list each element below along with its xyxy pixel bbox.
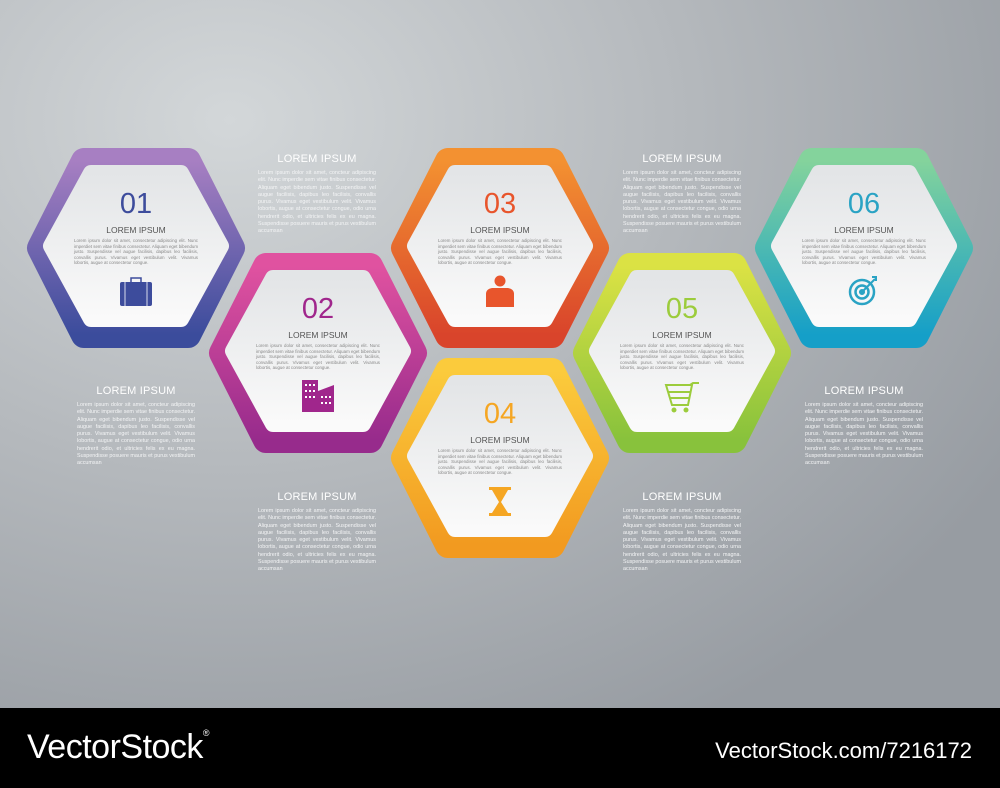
icon: cart — [666, 383, 699, 412]
hex 06 text — [802, 188, 926, 265]
text block bottom 1: Lorem ipsum dolor sit amet, concteur adipiscing elit. Nunc imperdie sem vitae finibus consectetur. Aliquam eget bibendum justo. Suspendisse vel augue facilisis, dapibus leo facilisis, convallis purus. Vivamus eget vestibulum velit. Vivamus lobortis, augue at consectetur congue, odio urna hendrerit odio, et ultricies felis ex eu magna. Suspendisse posuere mauris et purus vestibulum accumsan — [258, 508, 376, 572]
hex 04 text: LOREM IPSUM — [470, 435, 530, 445]
hex 03 text: 03 — [484, 188, 516, 220]
text block right: Lorem ipsum dolor sit amet, concteur adipiscing elit. Nunc imperdie sem vitae finibus consectetur. Aliquam eget bibendum justo. Suspendisse vel augue facilisis, dapibus leo facilisis, convallis purus. Vivamus eget vestibulum velit. Vivamus lobortis, augue at consectetur congue, odio urna hendrerit odio, et ultricies felis ex eu magna. Suspendisse posuere mauris et purus vestibulum accumsan — [805, 402, 923, 466]
icon: person — [486, 276, 514, 307]
hex 04 text: Lorem ipsum dolor sit amet, consectetur adipiscing elit. Nunc imperdiet sem vitae finibus consectetur. Aliquam eget bibendum justo. Suspendisse vel augue facilisis, dapibus leo facilisis, convallis purus. Vivamus eget vestibulum velit. Vivamus lobortis, augue at consectetur congue. — [438, 448, 562, 475]
hex 05 text: 05 — [666, 293, 698, 325]
text block right: LOREM IPSUM — [824, 385, 904, 397]
icon: target — [850, 277, 876, 304]
hex 04 text — [438, 398, 562, 475]
hex 06 text: Lorem ipsum dolor sit amet, consectetur adipiscing elit. Nunc imperdiet sem vitae finibus consectetur. Aliquam eget bibendum justo. Suspendisse vel augue facilisis, dapibus leo facilisis, convallis purus. Vivamus eget vestibulum velit. Vivamus lobortis, augue at consectetur congue. — [802, 238, 926, 265]
hex 05 text: LOREM IPSUM — [652, 330, 712, 340]
hex 02 text: LOREM IPSUM — [288, 330, 348, 340]
text block top 1: Lorem ipsum dolor sit amet, concteur adipiscing elit. Nunc imperdie sem vitae finibus consectetur. Aliquam eget bibendum justo. Suspendisse vel augue facilisis, dapibus leo facilisis, convallis purus. Vivamus eget vestibulum velit. Vivamus lobortis, augue at consectetur congue, odio urna hendrerit odio, et ultricies felis ex eu magna. Suspendisse posuere mauris et purus vestibulum accumsan — [258, 170, 376, 234]
footer bar: VectorStock.com/7216172 — [715, 738, 972, 763]
text block top 1: LOREM IPSUM — [277, 153, 357, 165]
hex 05 — [586, 266, 778, 440]
hex 06 text: LOREM IPSUM — [834, 225, 894, 235]
text block top 2: Lorem ipsum dolor sit amet, concteur adipiscing elit. Nunc imperdie sem vitae finibus consectetur. Aliquam eget bibendum justo. Suspendisse vel augue facilisis, dapibus leo facilisis, convallis purus. Vivamus eget vestibulum velit. Vivamus lobortis, augue at consectetur congue, odio urna hendrerit odio, et ultricies felis ex eu magna. Suspendisse posuere mauris et purus vestibulum accumsan — [623, 170, 741, 234]
text block top 2: LOREM IPSUM — [642, 153, 722, 165]
hex 01 text: 01 — [120, 188, 152, 220]
hex 02 text: 02 — [302, 293, 334, 325]
hex 01 text: LOREM IPSUM — [106, 225, 166, 235]
hex 02 text: Lorem ipsum dolor sit amet, consectetur adipiscing elit. Nunc imperdiet sem vitae finibus consectetur. Aliquam eget bibendum justo. Suspendisse vel augue facilisis, dapibus leo facilisis, convallis purus. Vivamus eget vestibulum velit. Vivamus lobortis, augue at consectetur congue. — [256, 343, 380, 370]
hex 02 — [222, 266, 414, 440]
hex 06 text: 06 — [848, 188, 880, 220]
text block left: LOREM IPSUM — [96, 385, 176, 397]
hex 06 — [768, 161, 960, 335]
hex 05 text: Lorem ipsum dolor sit amet, consectetur adipiscing elit. Nunc imperdiet sem vitae finibus consectetur. Aliquam eget bibendum justo. Suspendisse vel augue facilisis, dapibus leo facilisis, convallis purus. Vivamus eget vestibulum velit. Vivamus lobortis, augue at consectetur congue. — [620, 343, 744, 370]
hex 03 text: Lorem ipsum dolor sit amet, consectetur adipiscing elit. Nunc imperdiet sem vitae finibus consectetur. Aliquam eget bibendum justo. Suspendisse vel augue facilisis, dapibus leo facilisis, convallis purus. Vivamus eget vestibulum velit. Vivamus lobortis, augue at consectetur congue. — [438, 238, 562, 265]
hex 03 — [404, 161, 596, 335]
hex 04 text: 04 — [484, 398, 516, 430]
hex 02 text — [256, 293, 380, 370]
icon: buildings — [302, 380, 334, 412]
text block bottom 2: LOREM IPSUM — [642, 491, 722, 503]
icon: briefcase — [120, 278, 152, 306]
text block bottom 1: LOREM IPSUM — [277, 491, 357, 503]
footer bar: VectorStock® — [27, 728, 209, 766]
hex 01 text: Lorem ipsum dolor sit amet, consectetur adipiscing elit. Nunc imperdiet sem vitae finibus consectetur. Aliquam eget bibendum justo. Suspendisse vel augue facilisis, dapibus leo facilisis, convallis purus. Vivamus eget vestibulum velit. Vivamus lobortis, augue at consectetur congue. — [74, 238, 198, 265]
hex 03 text: LOREM IPSUM — [470, 225, 530, 235]
hex 03 text — [438, 188, 562, 265]
hex 01 text — [74, 188, 198, 265]
hex 01 — [40, 161, 232, 335]
footer bar — [0, 708, 1000, 788]
text block left: Lorem ipsum dolor sit amet, concteur adipiscing elit. Nunc imperdie sem vitae finibus consectetur. Aliquam eget bibendum justo. Suspendisse vel augue facilisis, dapibus leo facilisis, convallis purus. Vivamus eget vestibulum velit. Vivamus lobortis, augue at consectetur congue, odio urna hendrerit odio, et ultricies felis ex eu magna. Suspendisse posuere mauris et purus vestibulum accumsan — [77, 402, 195, 466]
hex 04 — [404, 371, 596, 545]
hex 05 text — [620, 293, 744, 370]
icon: hourglass — [489, 487, 511, 516]
text block bottom 2: Lorem ipsum dolor sit amet, concteur adipiscing elit. Nunc imperdie sem vitae finibus consectetur. Aliquam eget bibendum justo. Suspendisse vel augue facilisis, dapibus leo facilisis, convallis purus. Vivamus eget vestibulum velit. Vivamus lobortis, augue at consectetur congue, odio urna hendrerit odio, et ultricies felis ex eu magna. Suspendisse posuere mauris et purus vestibulum accumsan — [623, 508, 741, 572]
